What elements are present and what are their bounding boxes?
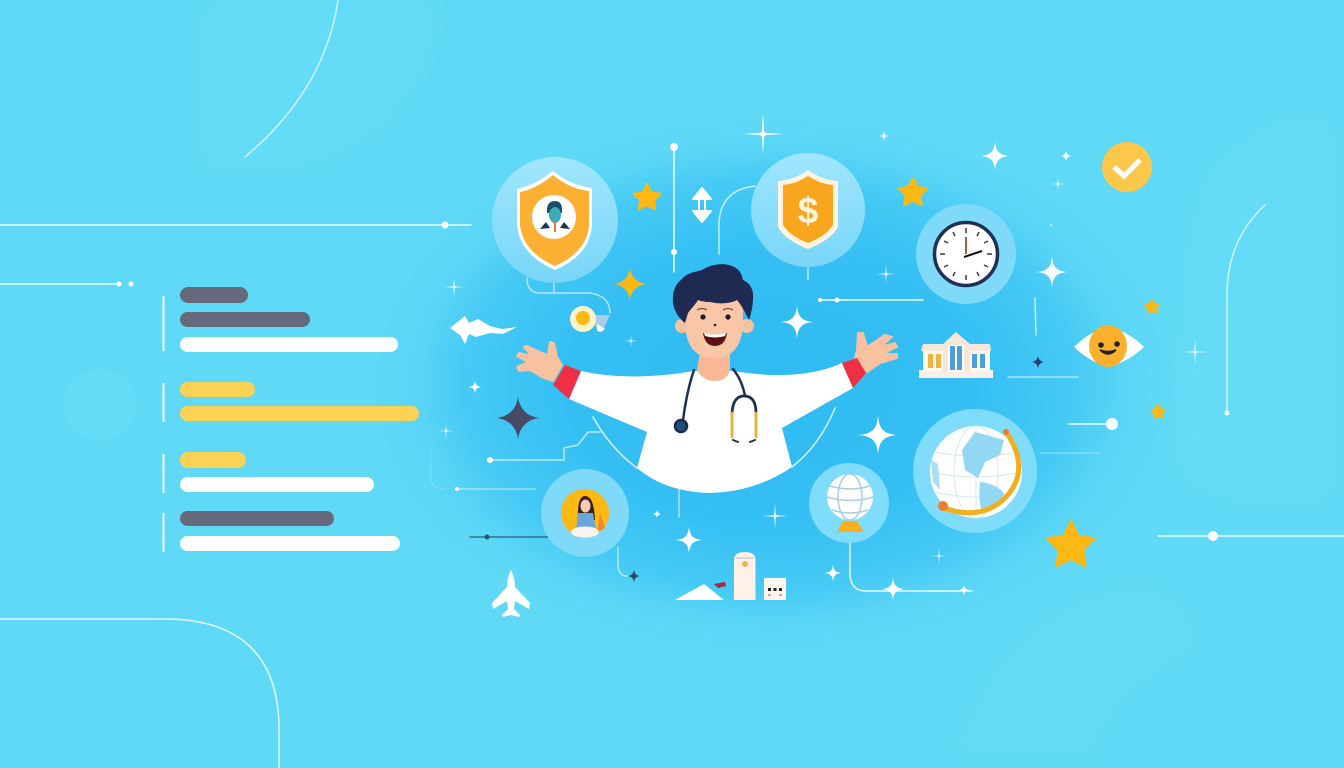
icon: dollar shield (751, 153, 865, 267)
icon: airplane (492, 570, 530, 617)
icon: clock (916, 204, 1016, 304)
left hand (517, 342, 562, 381)
face (685, 296, 743, 358)
icon: person shield (492, 157, 618, 283)
icon: smiling eye (1074, 325, 1144, 367)
dollar sign: $ (798, 190, 819, 231)
icon: white wave (450, 316, 517, 344)
list group 3 (162, 452, 374, 493)
icon: city skyline (675, 552, 786, 600)
icon: medal (570, 306, 610, 332)
right hand (855, 333, 897, 372)
list group 1 (162, 287, 398, 352)
bullet list placeholder bars (162, 287, 419, 552)
red cuffs (553, 365, 581, 399)
icon: large globe (913, 409, 1037, 533)
face details (697, 308, 733, 346)
icon: check badge (1102, 142, 1152, 192)
sparkles (438, 113, 1208, 601)
character: doctor (517, 264, 897, 493)
ears (675, 319, 689, 333)
list group 2 (162, 382, 419, 422)
icon: bank building (919, 332, 993, 378)
neck (697, 352, 730, 381)
icon: small globe (809, 463, 889, 543)
icon: woman portrait (541, 469, 629, 557)
white coat (569, 363, 853, 493)
yellow stars (614, 178, 1165, 566)
hair (673, 264, 753, 323)
stethoscope (675, 369, 756, 442)
icon: double arrow (693, 188, 711, 222)
dark sparkles (497, 356, 1044, 582)
list group 4 (162, 511, 400, 552)
